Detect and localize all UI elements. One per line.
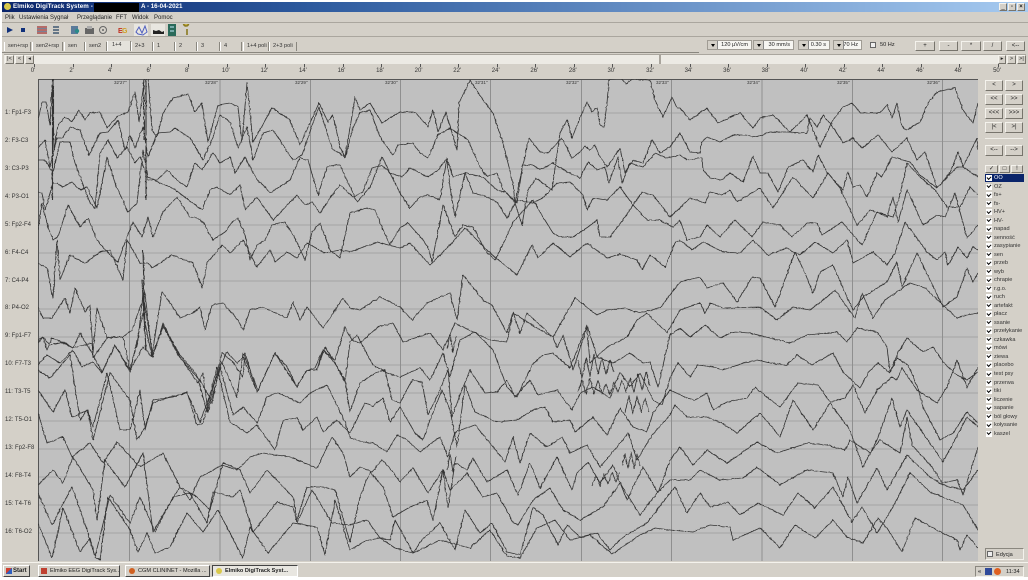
- low pass selector: 70 Hz: [843, 42, 858, 48]
- scroll bar: [4, 54, 1026, 64]
- navigation buttons panel: -->: [1010, 147, 1018, 153]
- artifact spikes: [52, 79, 146, 350]
- menu bar: [2, 13, 1028, 23]
- time stamps: 32'31'': [475, 80, 488, 85]
- text: liczenie: [994, 396, 1013, 402]
- channel labels: 2: F3-C3: [5, 138, 28, 144]
- menu bar: Plik: [5, 15, 15, 21]
- text: ruch: [994, 294, 1005, 300]
- redacted patient name: [94, 3, 139, 12]
- scroll buttons right: >: [1010, 56, 1013, 62]
- text: 4: [224, 43, 227, 49]
- time ruler: 48': [954, 68, 962, 74]
- text: OZ: [994, 184, 1002, 190]
- edit checkbox: Edycja: [996, 552, 1013, 558]
- task button digitrack eeg: Elmiko EEG DigiTrack Sys...: [50, 568, 120, 574]
- time ruler: 20': [415, 68, 422, 74]
- time ruler: 28': [569, 68, 577, 74]
- start button: Start: [13, 568, 27, 574]
- menu bar: Widok: [132, 15, 149, 21]
- amplitude selector: 120 µV/cm: [721, 42, 748, 48]
- system tray: «: [978, 569, 981, 575]
- time stamps: 32'29'': [295, 80, 308, 85]
- text: czkawka: [994, 337, 1015, 343]
- text: 1+4 poli: [247, 43, 267, 49]
- 50 Hz filter checkbox: 50 Hz: [880, 42, 895, 48]
- clock: 11:34: [1006, 569, 1020, 575]
- task button digitrack eeg: [38, 565, 120, 577]
- time stamps: 32'34'': [747, 80, 760, 85]
- channel labels: 12: T5-O1: [5, 417, 32, 423]
- text: sen: [68, 43, 77, 49]
- time ruler: 50': [993, 68, 1001, 74]
- time stamps: 32'28'': [205, 80, 218, 85]
- text: HV-: [994, 218, 1003, 224]
- menu bar: Pomoc: [154, 15, 173, 21]
- channel labels: 9: Fp1-F7: [5, 333, 31, 339]
- text: ssanie: [994, 320, 1010, 326]
- navigation buttons panel: <<<: [989, 110, 999, 116]
- time ruler: 22': [453, 68, 461, 74]
- toolbar icons: [2, 24, 1028, 37]
- menu bar: Przeglądanie: [77, 15, 112, 21]
- speed selector: 30 mm/s: [769, 42, 790, 48]
- menu bar: Ustawienia: [19, 15, 48, 21]
- gain button minus: -: [948, 43, 950, 49]
- trace 14 F8-T4: [38, 453, 978, 542]
- text: mówi: [994, 345, 1007, 351]
- gain button multiply: [961, 41, 981, 51]
- amplitude selector: [707, 40, 752, 50]
- time stamps: 32'36'': [927, 80, 940, 85]
- window buttons: _: [1001, 4, 1005, 10]
- speed selector: [753, 40, 794, 50]
- text: sen2+rsp: [36, 43, 59, 49]
- text: sapanie: [994, 405, 1014, 411]
- text: wyb: [994, 269, 1004, 275]
- time constant selector: [798, 40, 830, 50]
- gain button plus: +: [923, 43, 927, 49]
- text: fs-: [994, 201, 1000, 207]
- time ruler: 24': [492, 68, 500, 74]
- edit checkbox: [985, 548, 1024, 560]
- scroll buttons right: ▸: [1001, 56, 1003, 62]
- trace 6 F4-C4: [38, 222, 978, 298]
- text: 3: [201, 43, 204, 49]
- start button: [3, 565, 30, 577]
- navigation buttons panel: >|: [1011, 124, 1017, 130]
- trace 2 F3-C3: [38, 107, 978, 203]
- time ruler: 14': [299, 68, 307, 74]
- task button active: [212, 565, 298, 577]
- window buttons: ×: [1019, 4, 1023, 10]
- time stamps: [114, 80, 940, 85]
- time ruler: 46': [916, 68, 924, 74]
- text: ból głowy: [994, 414, 1017, 420]
- navigation buttons panel: >>>: [1009, 110, 1019, 116]
- window title: Elmiko DigiTrack System -: [13, 3, 93, 10]
- text: kaszel: [994, 431, 1010, 437]
- channel labels: 14: F8-T4: [5, 473, 31, 479]
- channel labels: 8: P4-O2: [5, 305, 29, 311]
- gain button plus: [915, 41, 935, 51]
- taskbar: [2, 562, 1028, 577]
- time ruler: 0': [31, 68, 35, 74]
- trace 8 P4-O2: [38, 283, 978, 403]
- time ruler: 40': [800, 68, 808, 74]
- time stamps: 32'27'': [114, 80, 127, 85]
- time ruler: 36': [723, 68, 731, 74]
- text: 1+4: [112, 42, 122, 48]
- navigation buttons panel: <--: [990, 147, 998, 153]
- text: zasypianie: [994, 243, 1020, 249]
- window buttons: [999, 3, 1025, 11]
- menu bar: Sygnał: [50, 15, 68, 21]
- scroll buttons right: >|: [1019, 56, 1024, 62]
- channel labels: 13: Fp2-F8: [5, 445, 34, 451]
- text: placebo: [994, 362, 1014, 368]
- montage tabs: [0, 38, 300, 53]
- gain button multiply: *: [970, 43, 972, 49]
- window buttons: ▫: [1011, 4, 1013, 10]
- toolbar icons: E: [118, 28, 123, 35]
- trace 11 T3-T5: [38, 355, 978, 450]
- trace 7 C4-P4: [38, 252, 978, 355]
- time ruler: 10': [222, 68, 230, 74]
- time ruler: [31, 64, 1001, 74]
- time ruler: 18': [376, 68, 384, 74]
- time ruler: 12': [260, 68, 268, 74]
- gain button divide: [983, 41, 1002, 51]
- text: 2+3 poli: [273, 43, 293, 49]
- trace 4 P3-O1: [38, 150, 978, 225]
- navigation buttons panel: <: [992, 82, 996, 88]
- marker checklist: [985, 174, 1024, 182]
- menu bar: FFT: [116, 15, 127, 21]
- trace 16 T6-O2: [38, 497, 978, 560]
- channel labels: 10: F7-T3: [5, 361, 31, 367]
- time ruler: 8': [185, 68, 189, 74]
- marker list toolbar: [985, 165, 1023, 173]
- channel labels: [5, 110, 34, 535]
- text: sen+rsp: [8, 43, 28, 49]
- trace 15 T4-T6: [38, 473, 978, 557]
- time stamps: 32'30'': [385, 80, 398, 85]
- text: OO: [994, 175, 1003, 181]
- record date: A - 16-04-2021: [141, 3, 182, 10]
- time ruler: 30': [607, 68, 615, 74]
- time ruler: 26': [530, 68, 538, 74]
- text: r.g.o.: [994, 286, 1006, 292]
- time constant selector: 0.30 s: [811, 42, 826, 48]
- trace 9 Fp1-F7: [38, 325, 978, 412]
- scroll buttons left: |<: [7, 56, 12, 62]
- channel labels: 7: C4-P4: [5, 278, 29, 284]
- marker list toolbar: ✓: [989, 166, 994, 172]
- text: HV+: [994, 209, 1005, 215]
- time ruler: 42': [839, 68, 847, 74]
- time ruler: 32': [646, 68, 654, 74]
- text: ziewa: [994, 354, 1008, 360]
- text: test psy: [994, 371, 1013, 377]
- channel labels: 4: P3-O1: [5, 194, 29, 200]
- text: tiki: [994, 388, 1001, 394]
- text: przeb: [994, 260, 1008, 266]
- time ruler: 38': [762, 68, 770, 74]
- marker list toolbar: □: [1003, 166, 1006, 172]
- 50 Hz filter checkbox: [870, 42, 895, 48]
- scroll buttons left: [5, 55, 34, 64]
- trace 1 Fp1-F3: [38, 77, 978, 225]
- text: płacz: [994, 311, 1007, 317]
- back button: <--: [1012, 43, 1019, 49]
- channel labels: 11: T3-T5: [5, 389, 30, 395]
- text: senność: [994, 235, 1015, 241]
- gain button divide: /: [992, 43, 993, 49]
- text: kołysanie: [994, 422, 1017, 428]
- navigation buttons panel: >>: [1010, 96, 1018, 102]
- text: napad: [994, 226, 1010, 232]
- channel labels: 3: C3-P3: [5, 166, 29, 172]
- time ruler: 2': [69, 68, 74, 74]
- trace 5 Fp2-F4: [38, 190, 978, 262]
- channel labels: 15: T4-T6: [5, 501, 31, 507]
- text: przełykanie: [994, 328, 1022, 334]
- scroll buttons right: [998, 55, 1026, 64]
- scroll buttons left: ◂: [28, 56, 31, 62]
- time stamps: 32'35'': [837, 80, 850, 85]
- text: 1: [157, 43, 160, 49]
- text: sen2: [89, 43, 101, 49]
- app icon: [4, 3, 11, 10]
- text: artefakt: [994, 303, 1013, 309]
- navigation buttons panel: >: [1012, 82, 1016, 88]
- navigation buttons panel: [985, 80, 1023, 156]
- text: 2: [179, 43, 182, 49]
- EEG plot: [38, 79, 978, 561]
- text: sen: [994, 252, 1003, 258]
- scroll thumb end: [659, 55, 661, 64]
- scroll buttons left: <: [18, 56, 21, 62]
- channel labels: 16: T6-O2: [5, 529, 32, 535]
- EEG traces: [38, 77, 978, 560]
- task button clininet: CGM CLININET - Mozilla ...: [138, 568, 207, 574]
- text: 2+3: [135, 43, 144, 49]
- text: chrapie: [994, 277, 1012, 283]
- channel labels: 5: Fp2-F4: [5, 222, 31, 228]
- time ruler: 4': [108, 68, 112, 74]
- system tray: [975, 566, 1024, 577]
- tab strip baseline: [2, 52, 699, 53]
- trace 12 T5-O1: [38, 367, 978, 467]
- channel labels: 6: F4-C4: [5, 250, 28, 256]
- fast activity bursts: [447, 334, 650, 486]
- channel labels: 1: Fp1-F3: [5, 110, 31, 116]
- gain button minus: [939, 41, 958, 51]
- marker list toolbar: !: [1016, 166, 1018, 172]
- time ruler: 44': [877, 68, 885, 74]
- navigation buttons panel: <<: [990, 96, 998, 102]
- time ruler: 6': [146, 68, 151, 74]
- title bar: [2, 2, 1028, 12]
- back button: [1006, 41, 1025, 51]
- trace 10 F7-T3: [38, 293, 978, 440]
- task button active: Elmiko DigiTrack Syst...: [225, 568, 288, 574]
- time stamps: 32'32'': [566, 80, 579, 85]
- text: fs+: [994, 192, 1002, 198]
- task button clininet: [125, 565, 210, 577]
- time ruler: 16': [338, 68, 345, 74]
- trace 3 C3-P3: [38, 140, 978, 208]
- time ruler: 34': [685, 68, 692, 74]
- time stamps: 32'33'': [656, 80, 669, 85]
- low pass selector: [833, 40, 862, 50]
- text: przerwa: [994, 380, 1014, 386]
- trace 13 Fp2-F8: [38, 413, 978, 508]
- toolbar icons: G: [122, 28, 128, 35]
- navigation buttons panel: |<: [991, 124, 997, 130]
